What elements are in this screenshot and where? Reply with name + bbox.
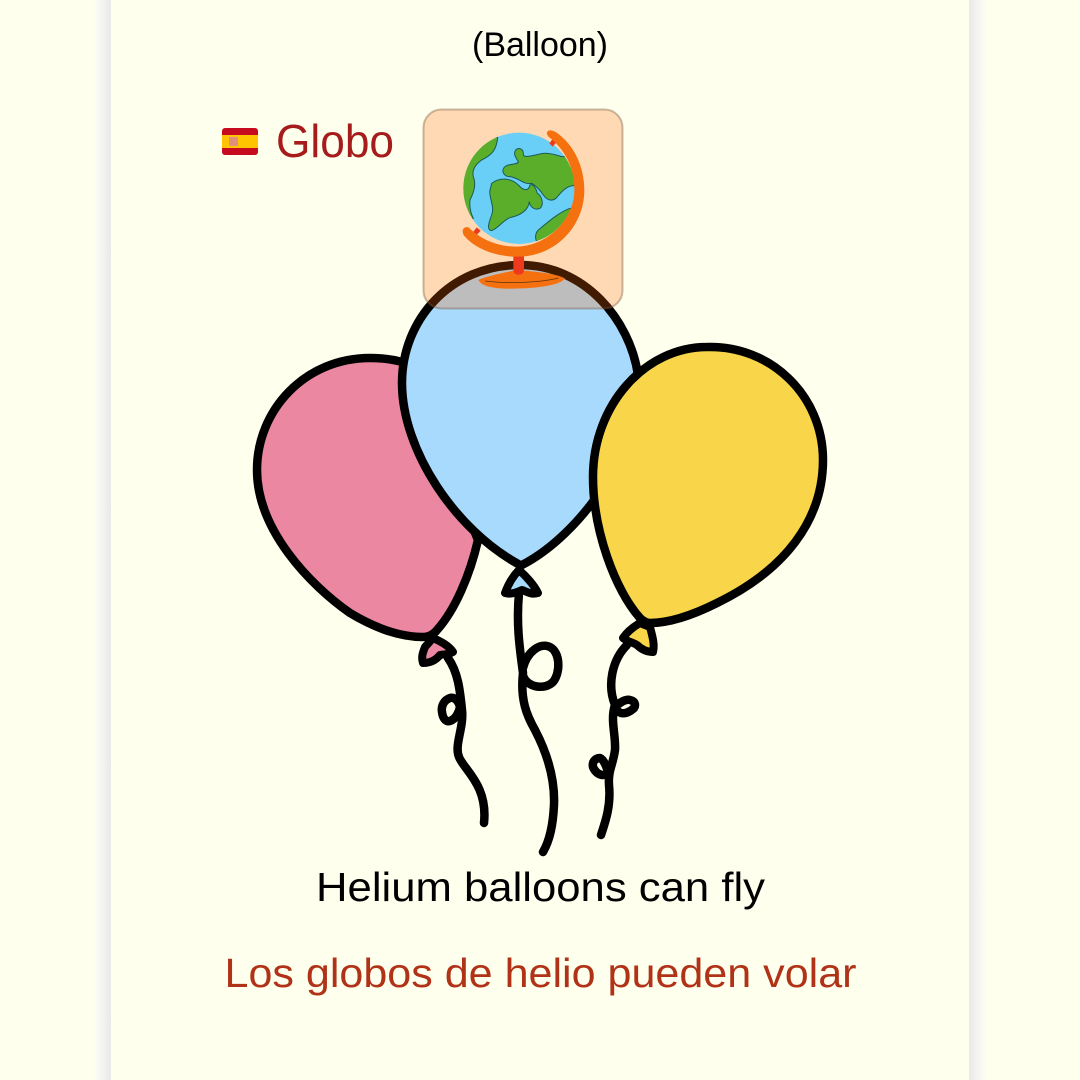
panel: card xyxy=(111,0,969,1080)
illustration: three balloons xyxy=(257,265,823,852)
caption: Spanish sentence: Los globos de helio pueden volar xyxy=(224,950,856,996)
balloon: yellow xyxy=(593,347,823,835)
icon: globe xyxy=(450,130,584,289)
balloon: blue xyxy=(402,265,638,852)
caption: English sentence: Helium balloons can fly xyxy=(316,864,766,910)
heading: English word: (Balloon) xyxy=(472,26,608,64)
balloon: pink xyxy=(257,358,484,823)
icon: Spanish flag xyxy=(222,128,258,155)
picture tile xyxy=(424,110,622,308)
heading: Spanish word: Globo xyxy=(276,115,394,167)
